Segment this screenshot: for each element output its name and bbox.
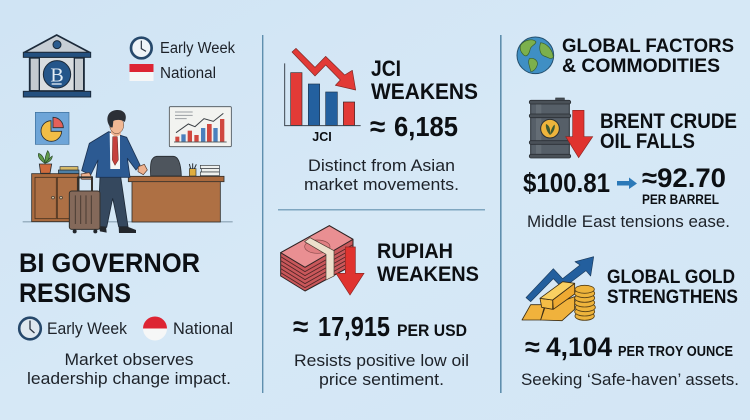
value: 6,185: [370, 111, 458, 142]
text: seeking safe-haven: Seeking ‘Safe-haven’ assets.: [521, 371, 739, 389]
value: 4,104 per troy ounce: 4,104: [546, 332, 612, 362]
heading: Rupiah weakens: RUPIAH: [377, 239, 453, 263]
heading: BI governor resigns: BI GOVERNOR: [19, 248, 200, 278]
heading: global factors: [562, 35, 734, 77]
label: national: National: [173, 320, 233, 338]
plant: [38, 151, 52, 173]
heading: JCI weakens: JCI: [371, 56, 401, 81]
heading: global gold: GLOBAL GOLD: [607, 266, 735, 288]
value: 6,185: 6,185: [394, 111, 458, 142]
person: [81, 110, 147, 233]
text: market observes: Market observes: [64, 351, 194, 369]
value: 92.70 per barrel: [642, 163, 726, 207]
icon: gold bars and coins with arrow: [522, 257, 595, 321]
icon: JCI bar chart with falling arrow: [285, 48, 361, 126]
icon: flag top: [130, 64, 154, 81]
text: distinct from Asian: [304, 157, 459, 194]
value: 17,915 per USD: ≈: [293, 311, 308, 342]
heading: JCI weakens: WEAKENS: [371, 79, 478, 104]
value: 17,915 per USD: 17,915: [318, 311, 390, 342]
arrow: [617, 178, 637, 189]
icon: clock: [19, 318, 41, 339]
label: JCI: JCI: [312, 130, 332, 144]
label: national top: National: [160, 65, 216, 82]
chair: [150, 156, 181, 176]
desk: [128, 176, 224, 222]
pencil cup and papers: [189, 163, 219, 176]
icon: round flag: [143, 316, 167, 340]
value: 92.70 per barrel: ≈92.70: [642, 163, 726, 193]
panel: BI governor resigns: [19, 35, 235, 388]
heading: global gold: STRENGTHENS: [607, 286, 738, 308]
text: middle east: Middle East tensions ease.: [527, 213, 730, 231]
icon: clock top: [131, 38, 152, 58]
value: $100.81: $100.81: [523, 168, 610, 198]
panel: Rupiah weakens: [281, 226, 479, 389]
icon: oil barrel with arrow: [529, 98, 593, 158]
books: [58, 167, 79, 174]
panel: global factors and commodities: [517, 35, 739, 389]
text: distinct from Asian: Distinct from Asian: [308, 157, 455, 175]
text: market observes: [27, 351, 231, 388]
icon: banknote stack with arrow: [281, 226, 364, 295]
bar chart poster: [169, 107, 231, 147]
heading: BI governor resigns: [19, 248, 200, 308]
text: distinct from Asian: market movements.: [304, 176, 459, 194]
heading: global factors: & COMMODITIES: [562, 55, 720, 77]
heading: BI governor resigns: RESIGNS: [19, 278, 131, 308]
cabinet: [32, 174, 79, 222]
panel: JCI weakens: [285, 48, 478, 194]
heading: Rupiah weakens: [377, 239, 479, 286]
label: early week top: Early Week: [160, 40, 235, 57]
value: 4,104 per troy ounce: ≈: [525, 332, 540, 362]
heading: JCI weakens: [371, 56, 478, 104]
icon: globe: [517, 37, 554, 74]
value: 4,104 per troy ounce: [525, 332, 733, 362]
text: market observes: leadership change impact.: [27, 370, 231, 388]
value: 4,104 per troy ounce: PER TROY OUNCE: [618, 344, 733, 360]
heading: Rupiah weakens: WEAKENS: [377, 262, 479, 286]
heading: global gold: [607, 266, 738, 308]
icon: bank building: [23, 35, 91, 97]
icon: bank building: B: [50, 64, 64, 86]
value: 17,915 per USD: PER USD: [397, 322, 467, 340]
text: resists positive: Resists positive low oil: [294, 352, 469, 370]
heading: Brent crude: [600, 109, 737, 153]
illustration: governor leaving office: [23, 107, 233, 233]
value: 17,915 per USD: [293, 311, 467, 342]
heading: Brent crude: OIL FALLS: [600, 129, 695, 153]
text: resists positive: price sentiment.: [319, 371, 444, 389]
value: 6,185: ≈: [370, 111, 385, 142]
label: early week: Early Week: [47, 320, 128, 338]
heading: global factors: GLOBAL FACTORS: [562, 35, 734, 57]
floor: [23, 220, 233, 223]
text: resists positive: [294, 352, 469, 389]
value: 92.70 per barrel: PER BARREL: [642, 192, 719, 207]
suitcase: [69, 177, 100, 233]
pie chart poster: [35, 112, 69, 144]
